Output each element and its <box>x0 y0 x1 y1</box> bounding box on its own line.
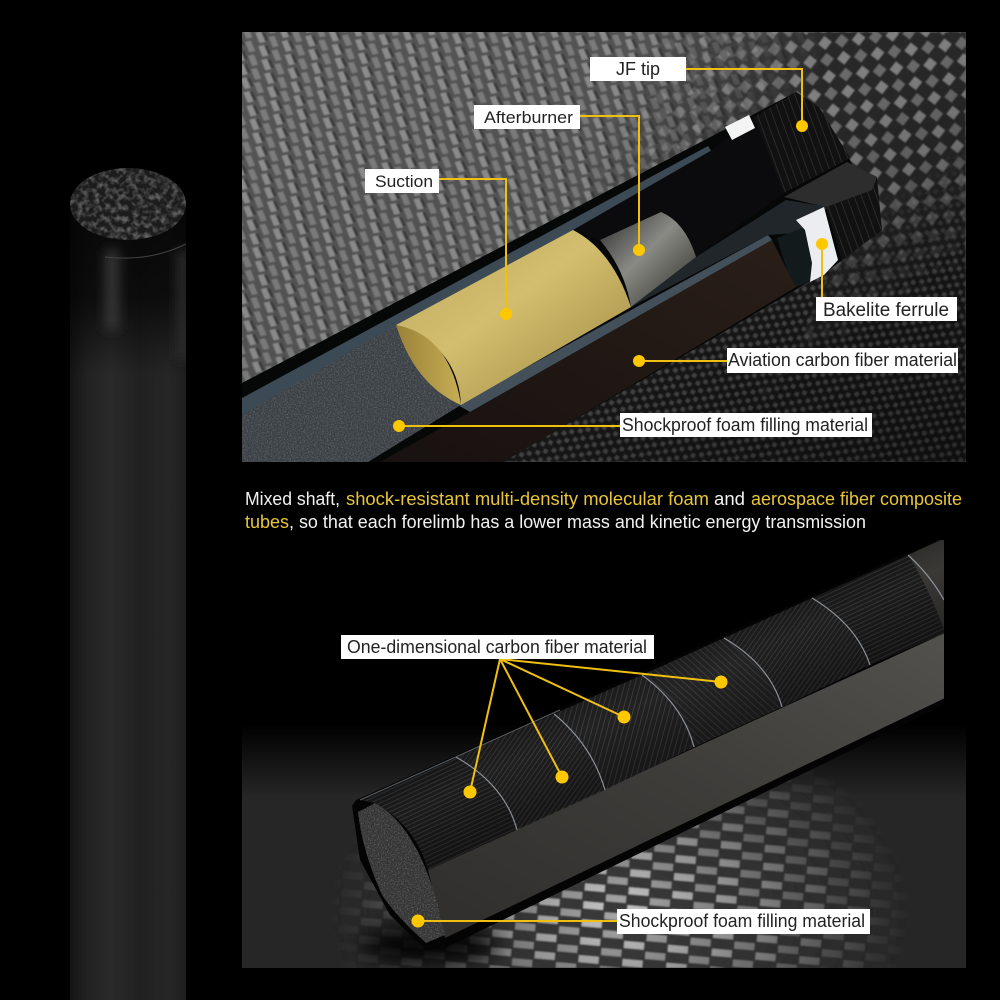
Leader: foam filling <box>412 914 617 928</box>
foam end <box>358 803 445 943</box>
description text: Mixed shaft, <box>245 489 340 509</box>
label: JF tip <box>590 57 686 81</box>
label: Shockproof foam filling material: Shockproof foam filling material <box>622 415 868 435</box>
gold suction <box>396 230 631 405</box>
foam core <box>242 325 461 462</box>
Leader: Shockproof foam <box>393 420 620 432</box>
Leader: Suction <box>439 179 512 320</box>
label: Suction: Suction <box>375 172 433 191</box>
label: Afterburner: Afterburner <box>484 108 573 127</box>
black interior <box>573 150 712 230</box>
lower dark wall <box>631 200 829 307</box>
floor <box>242 740 966 968</box>
silver afterburner <box>600 212 696 307</box>
carbon wrap segments <box>360 538 945 870</box>
label: Shockproof foam filling material: Shockproof foam filling material <box>619 911 865 931</box>
left cue shaft <box>70 168 188 1000</box>
second tip block <box>812 171 882 260</box>
Leaders: one-dimensional carbon fiber <box>464 659 728 798</box>
description text: shock-resistant multi-density molecular foam <box>346 489 709 509</box>
description text: and <box>714 489 745 509</box>
collar <box>777 227 812 287</box>
Leader: JF tip <box>686 69 808 132</box>
panel: cutaway shaft <box>240 30 970 465</box>
label: Afterburner <box>474 105 580 129</box>
label: One-dimensional carbon fiber material: One-dimensional carbon fiber material <box>347 637 647 657</box>
white band <box>725 115 755 140</box>
label: Bakelite ferrule: Bakelite ferrule <box>823 300 949 321</box>
brown carbon tube <box>380 240 796 462</box>
tube body <box>352 536 945 950</box>
Leader: Afterburner <box>580 116 645 256</box>
Leader: Bakelite ferrule <box>816 238 828 297</box>
label: Suction <box>365 169 439 193</box>
carbon weave background <box>240 30 970 465</box>
label: JF tip: JF tip <box>616 59 660 79</box>
description text <box>245 489 962 532</box>
Leader: Aviation carbon <box>633 355 727 367</box>
cutaway shaft outer wall <box>242 92 882 462</box>
JF tip block <box>754 92 850 193</box>
description text: tubes <box>245 512 289 532</box>
panel: outer shaft <box>242 536 966 970</box>
description text: aerospace fiber composite <box>751 489 962 509</box>
label: Aviation carbon fiber material: Aviation carbon fiber material <box>728 350 957 370</box>
bakelite ferrule <box>796 207 838 282</box>
description text: , so that each forelimb has a lower mass and kinetic energy transmission <box>289 512 866 532</box>
